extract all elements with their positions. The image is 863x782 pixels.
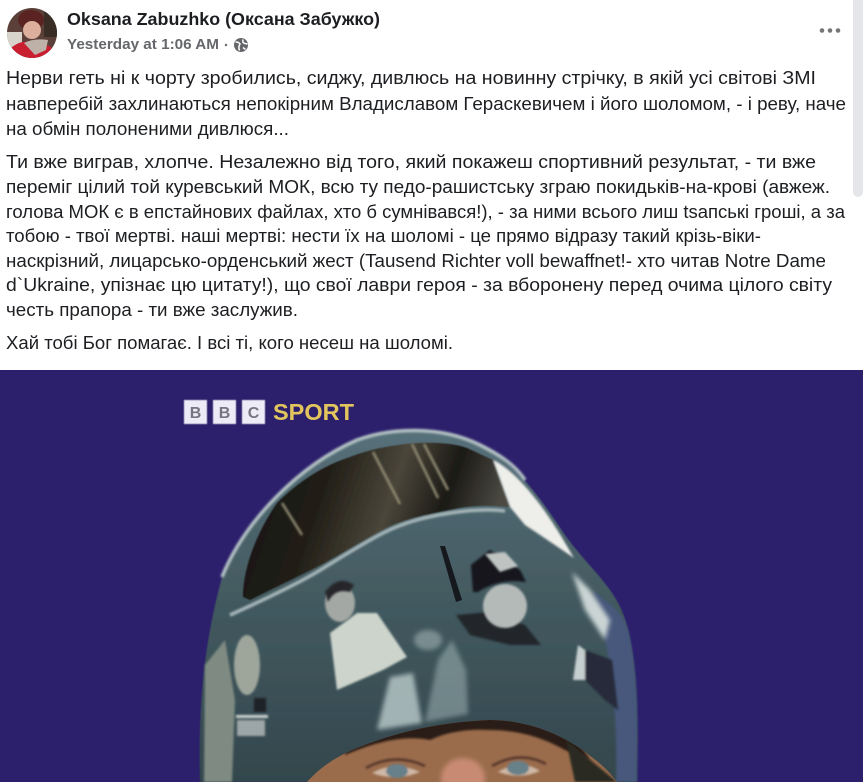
visor lower edge highlight <box>230 510 505 615</box>
paragraph 1: Нерви геть ні к чорту зробились, сиджу, дивлюсь на новинну стрічку, в якій усі світові ЗМІ <box>6 67 816 88</box>
photo on helmet: man in hat with rifle <box>440 546 541 645</box>
paragraph 3: Хай тобі Бог помагає. І всі ті, кого несеш на шоломі. <box>6 332 453 353</box>
photo panel: background <box>0 370 863 782</box>
paragraph 2: голова МОК є в епстайнових файлах, хто б сумнівався!), - за ними всього лиш tsапські гроші, а за <box>6 201 846 222</box>
icon: more options <box>820 28 840 33</box>
paragraph 2: переміг цілий той куревський МОК, всю ту педо-рашистську зграю покидьків-на-крові (авжеж. <box>6 176 830 197</box>
paragraph 1: навперебій захлинаються непокірним Владиславом Гераскевичем і його шоломом, - і реву, наче <box>6 93 846 114</box>
logo: BBC Sport: SPORT <box>273 399 354 425</box>
visor <box>243 443 510 600</box>
paragraph 2 <box>6 151 846 320</box>
helmet rim edge <box>222 430 525 577</box>
paragraph 2: честь прапора - ти вже заслужив. <box>6 299 298 320</box>
right edge highlights <box>572 572 610 640</box>
dark hair at right temple <box>566 740 617 782</box>
logo: BBC Sport <box>184 399 354 425</box>
photo on helmet: boy in white <box>325 581 407 690</box>
paragraph 2: d`Ukraine, упізнає цю цитату!), що свої лаври героя - за вборонену перед очима цілого світу <box>6 274 833 295</box>
hair fringe <box>344 720 590 760</box>
logo: BBC Sport: C <box>248 405 260 422</box>
visor white reflection <box>493 460 574 558</box>
logo: BBC Sport: B <box>219 405 230 422</box>
separator dot <box>225 44 227 46</box>
paragraph 2: наскрізний, лицарсько-орденський жест (Tausend Richter voll bewaffnet!- хто читав Notre Dame <box>6 250 826 271</box>
nose <box>441 758 485 782</box>
helmet shell <box>200 430 637 782</box>
helmet <box>200 430 637 782</box>
athlete face <box>307 720 617 782</box>
left eye <box>366 759 425 778</box>
paragraph 1 <box>6 67 846 139</box>
timestamp: Yesterday at 1:06 AM <box>67 36 219 53</box>
logo: BBC Sport: B <box>190 405 201 422</box>
author name: Oksana Zabuzhko (Оксана Забужко) <box>67 9 380 29</box>
right eye <box>492 757 546 776</box>
water splash marks <box>377 630 468 730</box>
left side photo <box>204 635 268 782</box>
avatar <box>7 8 57 58</box>
paragraph 2: тобою - твої мертві. наші мертві: нести їх на шоломі - це прямо відразу такий крізь-віки- <box>6 225 761 246</box>
right side photo <box>573 645 618 710</box>
visor reflections <box>282 444 448 535</box>
scrollbar <box>853 0 863 197</box>
helmet right side <box>592 590 637 782</box>
icon: globe <box>234 38 248 52</box>
paragraph 1: на обмін полоненими дивлюся... <box>6 118 289 139</box>
paragraph 2: Ти вже виграв, хлопче. Незалежно від того, який покажеш спортивний результат, - ти вже <box>6 151 816 172</box>
